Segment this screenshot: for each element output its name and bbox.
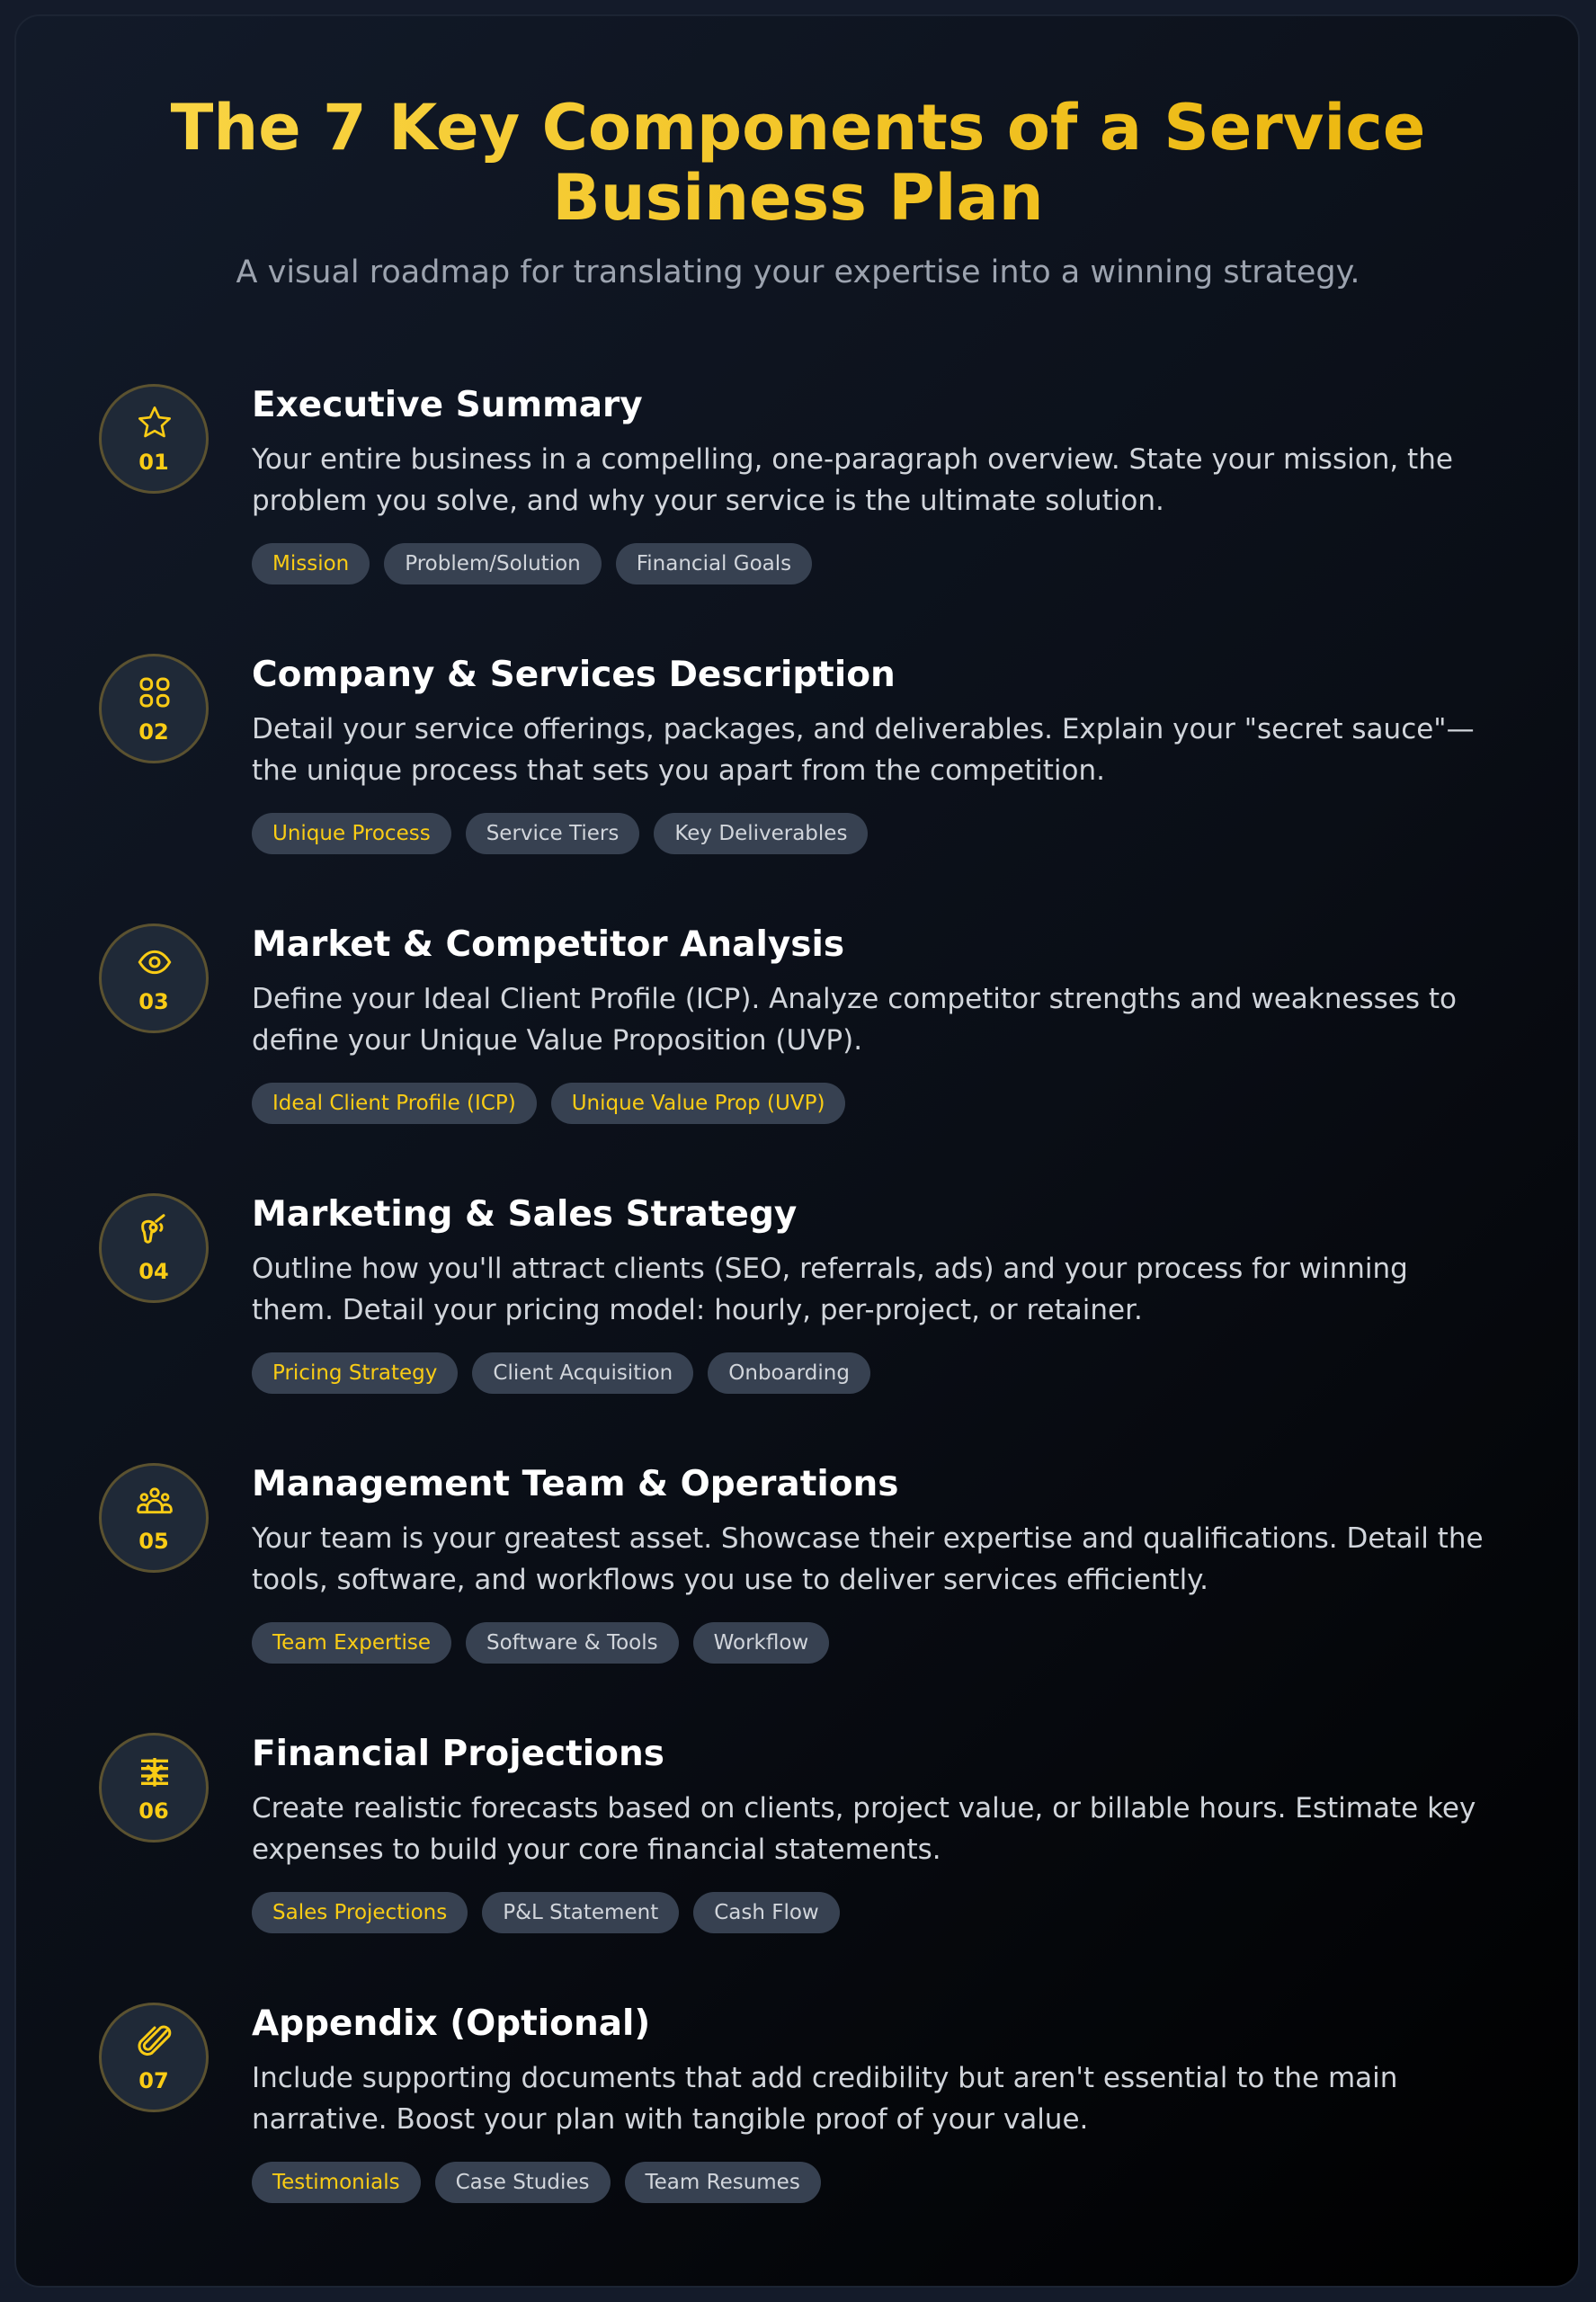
item 06: financial projections — [99, 1733, 1476, 1933]
tags: Case Studies — [456, 2171, 590, 2194]
icon circle 01: 01 — [138, 450, 169, 475]
description: Define your Ideal Client Profile (ICP). Analyze competitor strengths and weaknesses to define your Unique Value Proposition (UVP). — [252, 983, 1457, 1057]
tags — [252, 543, 812, 584]
tags: Team Expertise — [272, 1631, 431, 1655]
tags: Key Deliverables — [674, 822, 847, 845]
tags: Ideal Client Profile (ICP) — [272, 1092, 516, 1115]
tags: Unique Process — [272, 822, 431, 845]
description: Your entire business in a compelling, one-paragraph overview. State your mission, the problem you solve, and why your service is the ultimate solution. — [252, 443, 1453, 517]
tags: Cash Flow — [714, 1901, 819, 1924]
heading: Financial Projections — [252, 1734, 664, 1774]
tags: Onboarding — [728, 1361, 850, 1385]
icon circle 06 — [99, 1733, 209, 1842]
heading: Executive Summary — [252, 385, 643, 425]
description: Your team is your greatest asset. Showcase their expertise and qualifications. Detail the tools, software, and workflows you use to deliver services efficiently. — [252, 1522, 1484, 1596]
description: Create realistic forecasts based on clients, project value, or billable hours. Estimate key expenses to build your core financial statements. — [252, 1792, 1476, 1866]
icon circle 03: 03 — [138, 989, 169, 1014]
tags: Software & Tools — [486, 1631, 658, 1655]
tags: Testimonials — [272, 2171, 400, 2194]
icon circle 07 — [99, 2003, 209, 2112]
item 03: market analysis — [99, 923, 1457, 1124]
icon circle 04: 04 — [138, 1259, 169, 1284]
tags: Workflow — [714, 1631, 808, 1655]
description: Include supporting documents that add credibility but aren't essential to the main narrative. Boost your plan with tangible proof of your value. — [252, 2062, 1397, 2136]
item 04: marketing & sales — [99, 1193, 1408, 1394]
tags: Pricing Strategy — [272, 1361, 437, 1385]
heading: Appendix (Optional) — [252, 2003, 650, 2044]
icon circle 05: 05 — [138, 1529, 169, 1554]
icon circle 02 — [99, 654, 209, 763]
tags: Service Tiers — [486, 822, 619, 845]
tags: Financial Goals — [637, 552, 791, 576]
icon circle 05 — [99, 1463, 209, 1573]
icon circle 06: 06 — [138, 1798, 169, 1824]
tags: Problem/Solution — [405, 552, 581, 576]
subtitle: A visual roadmap for translating your expertise into a winning strategy. — [236, 254, 1360, 290]
title: Business Plan — [552, 161, 1044, 235]
icon circle 04 — [99, 1193, 209, 1303]
tags: Sales Projections — [272, 1901, 447, 1924]
tags: P&L Statement — [503, 1901, 658, 1924]
item 01: executive summary — [99, 384, 1453, 584]
tags: Unique Value Prop (UVP) — [572, 1092, 825, 1115]
title: The 7 Key Components of a Service — [171, 91, 1425, 165]
item 07: appendix — [99, 2003, 1397, 2203]
icon circle 03 — [99, 923, 209, 1033]
heading: Market & Competitor Analysis — [252, 924, 844, 965]
tags — [252, 813, 868, 854]
icon circle 01 — [99, 384, 209, 494]
tags: Mission — [272, 552, 349, 576]
tags: Client Acquisition — [493, 1361, 673, 1385]
heading: Company & Services Description — [252, 655, 896, 695]
tags — [252, 2162, 821, 2203]
heading: Marketing & Sales Strategy — [252, 1194, 797, 1235]
icon circle 02: 02 — [138, 719, 169, 745]
icon circle 07: 07 — [138, 2068, 169, 2093]
tags — [252, 1622, 829, 1664]
title — [0, 93, 1596, 233]
description: Outline how you'll attract clients (SEO, referrals, ads) and your process for winning them. Detail your pricing model: hourly, per-project, or retainer. — [252, 1253, 1408, 1326]
item 02: company & services — [99, 654, 1475, 854]
heading: Management Team & Operations — [252, 1464, 899, 1504]
description: Detail your service offerings, packages, and deliverables. Explain your "secret sauce"—the unique process that sets you apart from the competition. — [252, 713, 1475, 787]
tags: Team Resumes — [646, 2171, 800, 2194]
tags — [252, 1892, 840, 1933]
tags — [252, 1083, 845, 1124]
item 05: management team — [99, 1463, 1484, 1664]
tags — [252, 1352, 870, 1394]
